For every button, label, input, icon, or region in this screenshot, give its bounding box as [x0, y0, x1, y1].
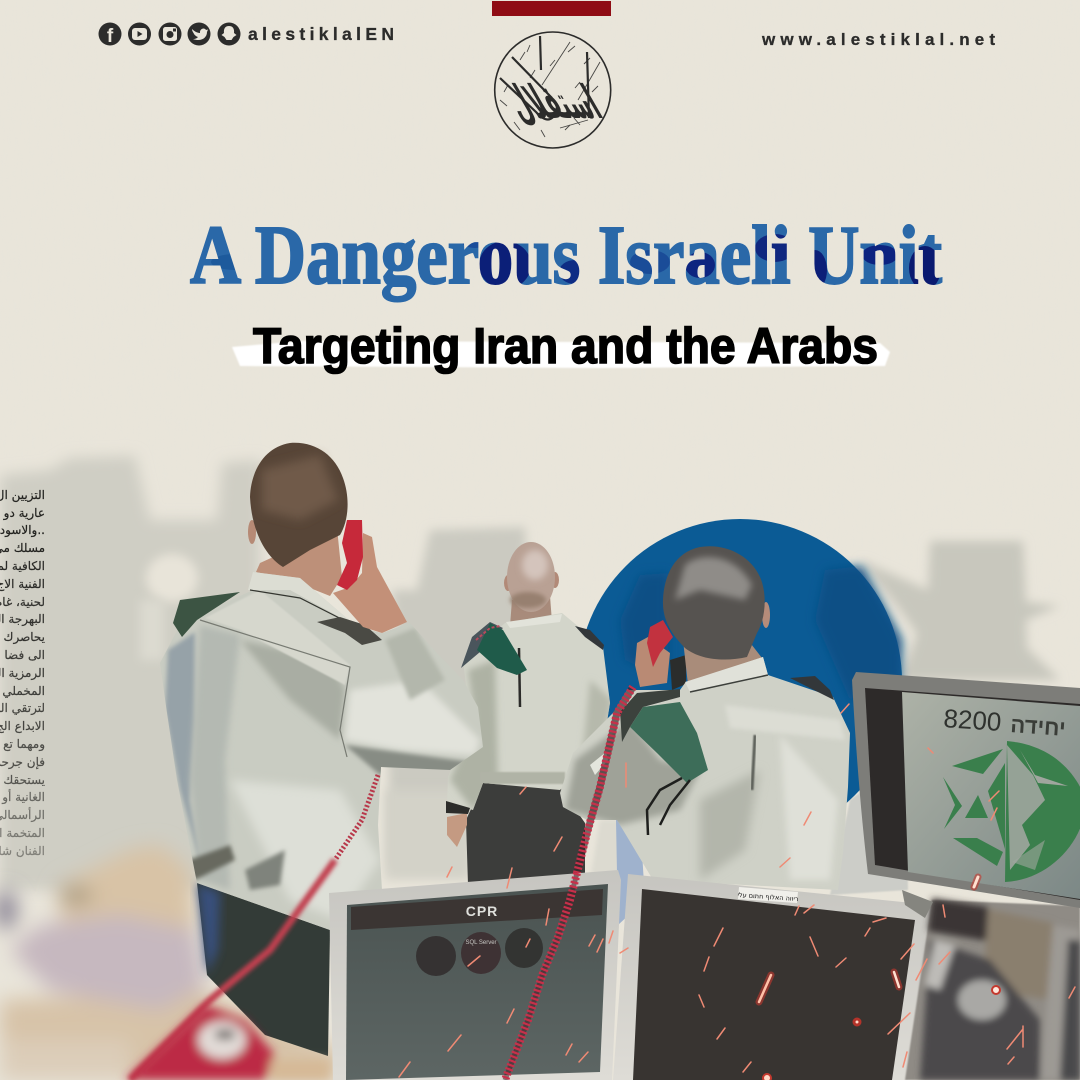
- newspaper column in Arabic: والاسود..: [0, 523, 45, 538]
- grey hair: [663, 546, 765, 660]
- frame: [329, 870, 621, 1080]
- red phone: [337, 520, 363, 590]
- frame: [613, 874, 932, 1080]
- ear: [248, 520, 256, 544]
- subtitle: Targeting Iran and the Arabs: [253, 318, 878, 374]
- monitor C: Unit 8200: [852, 672, 1080, 908]
- header band: [351, 889, 603, 930]
- wall shadows of hat silhouettes: [0, 456, 1060, 895]
- green unit emblem: [943, 741, 1080, 882]
- icon: snapchat: [218, 22, 240, 46]
- blurred foreground desk, bottom left: [0, 845, 340, 1080]
- icon: facebook: [98, 22, 122, 47]
- right epaulette: [790, 676, 834, 700]
- neck and chin strap: [670, 602, 770, 690]
- red phone: [647, 620, 673, 667]
- social media icons: [98, 22, 240, 47]
- newspaper column in Arabic: عارية دو: [3, 506, 45, 521]
- screen: [633, 889, 915, 1080]
- bald head: [504, 542, 559, 626]
- right epaulette: [317, 617, 382, 645]
- bezel interior: [865, 688, 1080, 900]
- SQL circles: SQL Server: [465, 940, 497, 946]
- title: A Dangerous Israeli Unit: [190, 209, 942, 302]
- blurred red object at bottom: [125, 1005, 330, 1080]
- grey shoulder strap: [620, 689, 680, 742]
- blurred device, bottom right: [902, 890, 1080, 1080]
- social handle: alestiklalEN: [248, 24, 394, 44]
- subtitle highlight brush: [232, 341, 890, 368]
- monitor B: dark screen: [613, 874, 932, 1080]
- flying sparks: [399, 704, 1075, 1080]
- shirt: [447, 613, 612, 810]
- shirt: [160, 572, 483, 930]
- neck: [256, 528, 342, 596]
- green beret and strap on shoulder: [461, 622, 527, 675]
- monitor A: CPR: [329, 870, 621, 1080]
- icon: twitter: [188, 22, 210, 46]
- CPR label: CPR: [466, 903, 498, 919]
- coiled red phone cable, soldier 3: [577, 687, 633, 873]
- dark trousers: [197, 883, 330, 1056]
- icon: facebook: f: [107, 26, 114, 47]
- hand: [447, 813, 467, 847]
- right epaulette: [575, 626, 604, 650]
- website url: www.alestiklal.net: [761, 30, 995, 49]
- shirt body: [560, 657, 850, 890]
- SQL circles: [416, 928, 543, 976]
- hat shadows on blue circle: [620, 566, 902, 700]
- logo: round calligraphic seal: [494, 32, 611, 148]
- heading digits 8200: 8200: [943, 703, 1002, 737]
- soldier 3, right: [560, 546, 850, 925]
- raised hand: [635, 637, 670, 687]
- coiled red phone cable, soldier 1: [130, 775, 378, 1080]
- icon: youtube: [128, 22, 151, 46]
- coiled red cable over monitor: [505, 873, 577, 1080]
- newspaper column in Arabic: [0, 488, 45, 858]
- heading Hebrew: יחידה: [1010, 712, 1067, 741]
- red top bar: [492, 1, 611, 16]
- black beret strap: [647, 778, 690, 835]
- blue-tinted lower shirt: [616, 820, 645, 925]
- hand holding phone: [333, 533, 407, 633]
- screen: [902, 692, 1080, 899]
- trousers: [466, 783, 585, 885]
- newspaper column in Arabic: الغانية أو: [1, 789, 45, 805]
- sticker label: ריווה האלוף חתום עלי: [737, 891, 799, 903]
- screen: [346, 884, 608, 1080]
- soldier 1, left foreground: [160, 443, 483, 1056]
- logo: round calligraphic seal: استقلال: [494, 75, 611, 129]
- icon: instagram: [158, 22, 182, 46]
- newspaper column in Arabic: يستحقك: [3, 773, 45, 787]
- newspaper column in Arabic: الى فضا: [4, 648, 45, 662]
- cuff: [446, 801, 470, 814]
- left epaulette: [173, 592, 240, 637]
- soldier 2, centre: [446, 542, 612, 885]
- blue circle: [578, 519, 902, 843]
- green beret on shoulder: [630, 702, 708, 783]
- brown hair: [250, 443, 348, 567]
- frame: [852, 672, 1080, 908]
- newspaper column in Arabic: ومهما تع: [3, 737, 45, 752]
- sleeve badge: [590, 752, 608, 775]
